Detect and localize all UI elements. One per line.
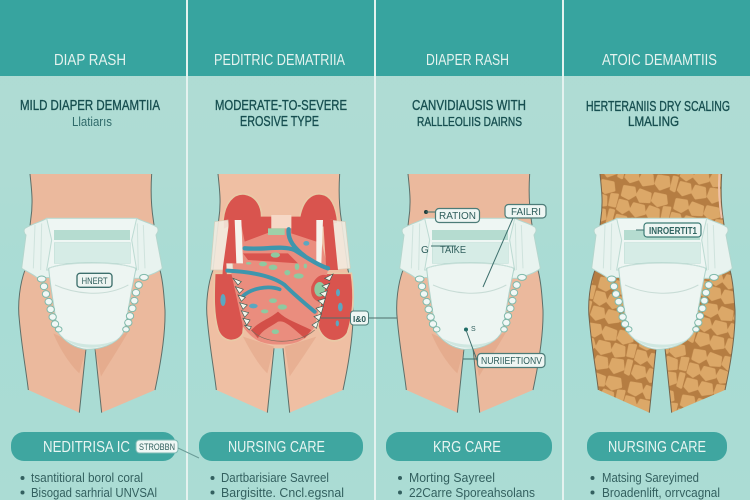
callout: rash tag bbox=[350, 311, 368, 325]
connector: rash label to next panel bbox=[321, 317, 423, 319]
care pill: column 2 bbox=[199, 432, 363, 461]
panel: column 3 header: DIAPER RASH bbox=[426, 52, 509, 69]
callouts: candidiasis labels: S bbox=[471, 326, 476, 333]
subtitle: column 1: MILD DIAPER DEMAMTIIA bbox=[20, 98, 160, 114]
bullet list: column 1: tsantitioral borol coral bbox=[31, 471, 143, 485]
subtitle: column 3 bbox=[412, 98, 526, 129]
care pill: column 1: NEDITRISA IC bbox=[43, 439, 130, 456]
subtitle: column 1 bbox=[20, 98, 160, 129]
white scallops bbox=[233, 274, 333, 330]
callouts: candidiasis labels: RATION bbox=[439, 211, 476, 222]
care pill: column 2: NURSING CARE bbox=[228, 439, 325, 456]
white waistband strips bbox=[211, 220, 350, 270]
bullet list: column 4 bbox=[590, 471, 720, 500]
illustration: mild diaper dermatitis bbox=[19, 174, 165, 413]
panel: column 1 header bbox=[0, 0, 186, 76]
subtitle: column 4: LMALING bbox=[628, 113, 679, 129]
bullet list: column 3 bbox=[398, 471, 535, 500]
blue veins bbox=[227, 229, 328, 312]
subtitle: column 2: EROSIVE TYPE bbox=[240, 114, 319, 130]
care pill: column 4: NURSING CARE bbox=[608, 439, 706, 456]
bullet list: column 4: Broadenlift, orrvcagnal bbox=[602, 486, 720, 500]
callout: atopic label bbox=[636, 223, 701, 237]
callouts: candidiasis labels: G bbox=[421, 245, 429, 256]
subtitle: column 2 bbox=[215, 98, 347, 130]
green spots bbox=[246, 252, 325, 334]
subtitle: column 3: RALLLEOLIIS DAIRNS bbox=[417, 114, 522, 129]
care pill: column 3: KRG CARE bbox=[433, 439, 501, 456]
care pill: column 4 bbox=[587, 432, 727, 461]
care pill: column 1: STROBBN bbox=[139, 442, 175, 453]
panel: column 2 header: PEDITRIC DEMATRIIA bbox=[214, 52, 345, 69]
diaper label: HNERT bbox=[82, 276, 108, 286]
callouts: candidiasis labels: TAIKE bbox=[440, 245, 466, 256]
callout: rash tag: I&0 bbox=[353, 314, 366, 324]
panel: column 4 header bbox=[564, 0, 750, 76]
illustration: candidiasis bbox=[397, 174, 543, 413]
bullet list: column 3: 22Carre Sporeahsolans bbox=[409, 486, 535, 500]
bullet list: column 2: Bargisitte. Cncl.egsnal bbox=[221, 486, 344, 500]
bullet list: column 4: Matsing Sareyimed bbox=[602, 471, 699, 485]
connector: badge to pill bbox=[178, 448, 199, 458]
subtitle: column 2: MODERATE-TO-SEVERE bbox=[215, 98, 347, 114]
subtitle: column 3: CANVIDIAUSIS WITH bbox=[412, 98, 526, 114]
subtitle: column 1: Llatiarıs bbox=[72, 114, 112, 129]
care pill: column 3 bbox=[386, 432, 552, 461]
blue spots bbox=[220, 241, 343, 326]
diaper label bbox=[77, 273, 112, 287]
bullet list: column 1 bbox=[20, 471, 157, 500]
illustration: moderate-to-severe erosive type bbox=[207, 174, 353, 413]
care pill: column 1 bbox=[11, 432, 178, 461]
panel: column 3 header bbox=[376, 0, 562, 76]
bullet list: column 1: Bisogad sarhrial UNVSAl bbox=[31, 486, 157, 500]
bullet list: column 2: Dartbarisiare Savreel bbox=[221, 471, 329, 485]
panel: column 2 header bbox=[188, 0, 374, 76]
bullet list: column 3: Morting Sayreel bbox=[409, 471, 495, 485]
illustration: atopic dermatitis bbox=[589, 174, 735, 413]
panel: column 1 header: DIAP RASH bbox=[54, 52, 126, 69]
callouts: candidiasis labels: NURIIEFTIONV bbox=[481, 356, 542, 367]
bullet list: column 2 bbox=[210, 471, 344, 500]
callouts: candidiasis labels bbox=[421, 204, 546, 368]
callouts: candidiasis labels: FAILRI bbox=[511, 207, 541, 218]
callout: atopic label: INROERTIT1 bbox=[649, 226, 697, 237]
rash on hips bbox=[214, 194, 353, 341]
panel: column 4 header: ATOIC DEMAMTIIS bbox=[602, 52, 717, 69]
subtitle: column 4 bbox=[586, 99, 730, 129]
